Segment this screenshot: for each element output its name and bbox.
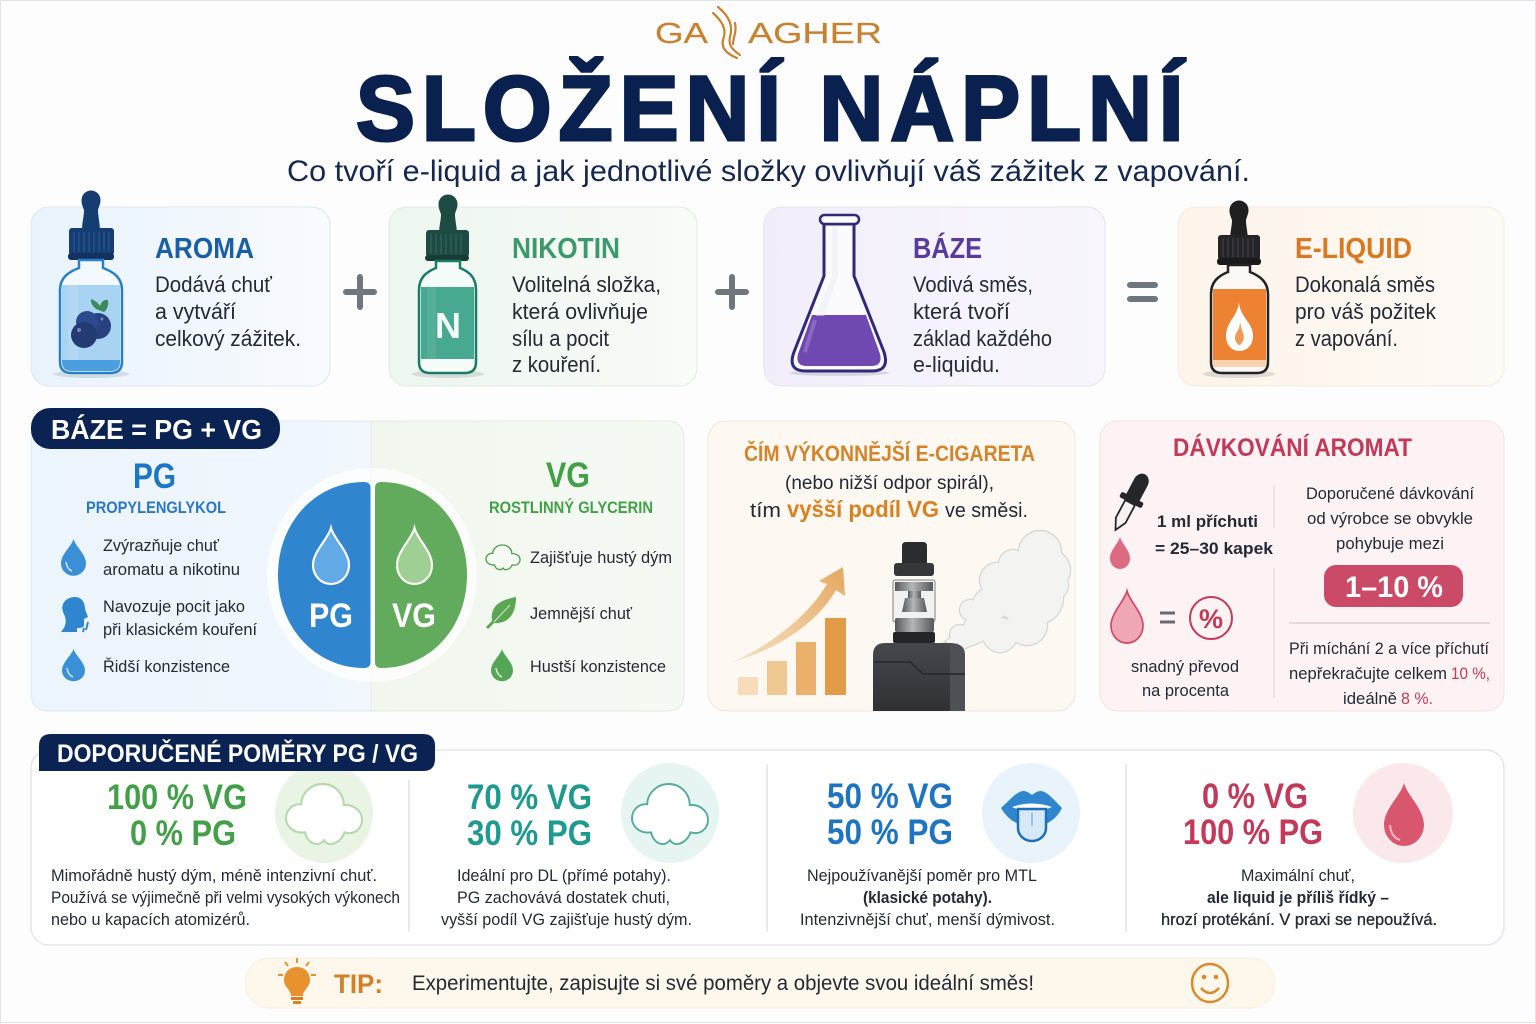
text: aroma description: celkový zážitek. — [155, 326, 301, 351]
text: mixing note: Při míchání 2 a více příchutí — [1289, 639, 1489, 658]
title: SLOŽENÍ NÁPLNÍ — [356, 56, 1186, 160]
column: 50 vg: Intenzivnější chuť, menší dýmivost. — [800, 911, 1055, 929]
text: aroma description — [155, 272, 301, 351]
text: baze description: e-liquidu. — [913, 352, 1000, 377]
icon: light bulb — [278, 958, 316, 1004]
panel: dosage — [1100, 421, 1504, 711]
icon: cloud — [621, 763, 719, 863]
column: pg — [61, 457, 257, 681]
panel: dosage: = 25–30 kapek — [1155, 539, 1274, 558]
panel: nikotin: NIKOTIN — [512, 233, 620, 265]
column: 70 vg — [441, 763, 719, 929]
panel: e-liquid — [1178, 200, 1504, 386]
logo: AGHER — [748, 18, 882, 50]
text: recommendation: Doporučené dávkování — [1306, 484, 1474, 503]
text: smoking feel: při klasickém kouření — [103, 620, 257, 639]
text: nikotin description: Volitelná složka, — [512, 272, 661, 297]
arrow: equals — [1130, 285, 1155, 299]
icon: percent — [1190, 597, 1232, 639]
icon: drop — [61, 539, 86, 576]
logo — [655, 7, 882, 58]
text: vg share: ve směsi. — [945, 500, 1028, 522]
arrow: plus 2 — [718, 277, 746, 307]
icon: pipette — [1105, 469, 1156, 536]
text: aroma description: a vytváří — [155, 299, 236, 324]
column: 0 vg: Maximální chuť, — [1241, 867, 1355, 885]
icon: vape smoke — [945, 531, 1070, 652]
panel: power — [708, 421, 1075, 711]
text: mixing note: nepřekračujte celkem — [1289, 664, 1447, 683]
icon: drop — [491, 649, 513, 681]
column: 50 vg: (klasické potahy). — [863, 889, 992, 907]
panel: power: (nebo nižší odpor spirál), — [785, 472, 994, 494]
column: 70 vg: vyšší podíl VG zajišťuje hustý dým. — [441, 911, 692, 929]
icon: nicotine bottle — [412, 194, 484, 378]
heading badge — [31, 408, 280, 449]
icon: drop — [62, 649, 85, 681]
chart: pg vg circle: VG — [392, 597, 436, 635]
panel: power: ČÍM VÝKONNĚJŠÍ E-CIGARETA — [744, 441, 1035, 466]
panel: dosage: 1 ml příchuti — [1157, 512, 1258, 531]
column: pg: PG — [133, 457, 176, 496]
text: nikotin description — [512, 272, 661, 377]
column: 0 vg: 100 % PG — [1183, 813, 1323, 852]
text: e-liquid description — [1295, 272, 1437, 351]
text: conversion: snadný převod — [1131, 657, 1239, 676]
column: vg: ROSTLINNÝ GLYCERIN — [489, 498, 653, 517]
panel: baze — [764, 207, 1105, 386]
text: mixing note: 8 %. — [1401, 689, 1433, 708]
column: 70 vg: PG zachovává dostatek chuti, — [457, 889, 670, 907]
text: mixing note — [1289, 639, 1490, 708]
text: baze description: základ každého — [913, 326, 1052, 351]
column: 50 vg — [800, 763, 1080, 929]
column: vg: Jemnější chuť — [530, 604, 633, 623]
panel: baze pg vg — [31, 408, 684, 711]
text: conversion: na procenta — [1142, 681, 1230, 700]
text: aroma description: Dodává chuť — [155, 272, 273, 297]
icon: small drop — [1110, 537, 1130, 569]
chart: rising bars — [738, 618, 846, 695]
text: vg share — [750, 496, 1028, 522]
icon: flame drop — [1226, 302, 1253, 351]
column: 100 vg: nebo u kapacích atomizérů. — [51, 911, 250, 929]
icon: big drop — [1111, 591, 1143, 643]
text: recommendation: pohybuje mezi — [1336, 534, 1444, 553]
text: mixing note: ideálně — [1343, 689, 1397, 708]
panel: tip — [245, 958, 1275, 1008]
text: nikotin description: sílu a pocit — [512, 326, 609, 351]
text: nikotin description: která ovlivňuje — [512, 299, 648, 324]
column: 70 vg: 30 % PG — [467, 814, 592, 853]
icon: percent: % — [1199, 604, 1223, 634]
text: nikotin description: z kouření. — [512, 352, 601, 377]
column: 100 vg: Mimořádně hustý dým, méně intenzivní chuť. — [51, 867, 377, 885]
column: vg: VG — [546, 456, 590, 495]
callout: 1-10 %: 1–10 % — [1345, 571, 1443, 604]
arrow: growth — [733, 567, 845, 662]
chart: pg vg circle: PG — [309, 597, 353, 635]
text: smoking feel — [103, 597, 257, 639]
text: mixing note: 10 %, — [1451, 664, 1490, 683]
text: e-liquid description: z vapování. — [1295, 326, 1398, 351]
icon: red drop — [1353, 763, 1453, 863]
column: 70 vg: 70 % VG — [467, 778, 592, 817]
panel: aroma: AROMA — [155, 233, 254, 265]
panel: e-liquid: E-LIQUID — [1295, 233, 1412, 265]
icon: thick cloud — [275, 763, 373, 863]
icon: e-liquid bottle — [1203, 200, 1275, 378]
logo: GA — [655, 18, 709, 50]
icon: cloud — [486, 545, 520, 570]
heading badge: BÁZE = PG + VG — [51, 414, 262, 445]
text: baze description: která tvoří — [913, 299, 1010, 324]
column: 100 vg: 0 % PG — [130, 814, 236, 853]
column: vg: Zajišťuje hustý dým — [530, 548, 672, 567]
column: vg — [486, 456, 672, 681]
column: 0 vg — [1161, 763, 1453, 929]
panel: baze: BÁZE — [913, 231, 982, 265]
chart: pg vg circle — [267, 468, 477, 682]
text: flavour: aromatu a nikotinu — [103, 560, 240, 579]
icon: smiley — [1192, 964, 1228, 1002]
column: 50 vg: 50 % PG — [827, 813, 953, 852]
column: 100 vg: Používá se výjimečně při velmi vysokých výkonech — [51, 889, 400, 907]
column: 100 vg — [39, 734, 435, 929]
text: e-liquid description: Dokonalá směs — [1295, 272, 1435, 297]
text: smoking feel: Navozuje pocit jako — [103, 597, 245, 616]
column: pg: Řidší konzistence — [103, 657, 230, 676]
panel: tip: TIP: — [334, 969, 383, 999]
column: 50 vg: 50 % VG — [827, 777, 953, 816]
text: baze description: Vodivá směs, — [913, 272, 1033, 297]
text: flavour: Zvýrazňuje chuť — [103, 536, 220, 555]
icon: nicotine bottle: N — [435, 305, 461, 346]
text: flavour — [103, 536, 240, 579]
column: 100 vg: 100 % VG — [107, 778, 247, 817]
text: baze description — [913, 272, 1052, 377]
callout: 1-10 % — [1324, 565, 1463, 607]
text: vg share: vyšší podíl VG — [787, 496, 939, 522]
text: recommendation: od výrobce se obvykle — [1307, 509, 1473, 528]
panel: nikotin — [389, 194, 697, 386]
icon: vape device — [873, 542, 965, 711]
text: recommendation — [1306, 484, 1474, 553]
badge: heading: DOPORUČENÉ POMĚRY PG / VG — [57, 738, 418, 768]
arrow: plus 1 — [346, 277, 374, 307]
subtitle: Co tvoří e-liquid a jak jednotlivé složky ovlivňují váš zážitek z vapování. — [287, 155, 1250, 188]
icon: head — [61, 597, 88, 632]
text: conversion — [1131, 657, 1239, 700]
icon: lips and tongue — [982, 763, 1080, 863]
icon: aroma bottle — [53, 190, 129, 378]
icon: flask — [789, 215, 889, 376]
column: 0 vg: 0 % VG — [1202, 777, 1308, 816]
column: vg: Hustší konzistence — [530, 657, 666, 676]
icon: blueberries — [71, 299, 111, 348]
panel: dosage: DÁVKOVÁNÍ AROMAT — [1173, 433, 1412, 462]
icon: leaf — [486, 597, 516, 629]
panel: ratios — [31, 734, 1504, 945]
column: 50 vg: Nejpoužívanější poměr pro MTL — [807, 867, 1037, 885]
column: 0 vg: ale liquid je příliš řídký – — [1207, 889, 1389, 907]
column: pg: PROPYLENGLYKOL — [86, 499, 226, 517]
column: 70 vg: Ideální pro DL (přímé potahy). — [457, 867, 671, 885]
panel: aroma — [31, 190, 330, 386]
text: vg share: tím — [750, 500, 781, 522]
panel: tip: Experimentujte, zapisujte si své poměry a objevte svou ideální směs! — [412, 972, 1034, 995]
column: 0 vg: hrozí protékání. V praxi se nepoužívá. — [1161, 911, 1437, 929]
text: e-liquid description: pro váš požitek — [1295, 299, 1437, 324]
